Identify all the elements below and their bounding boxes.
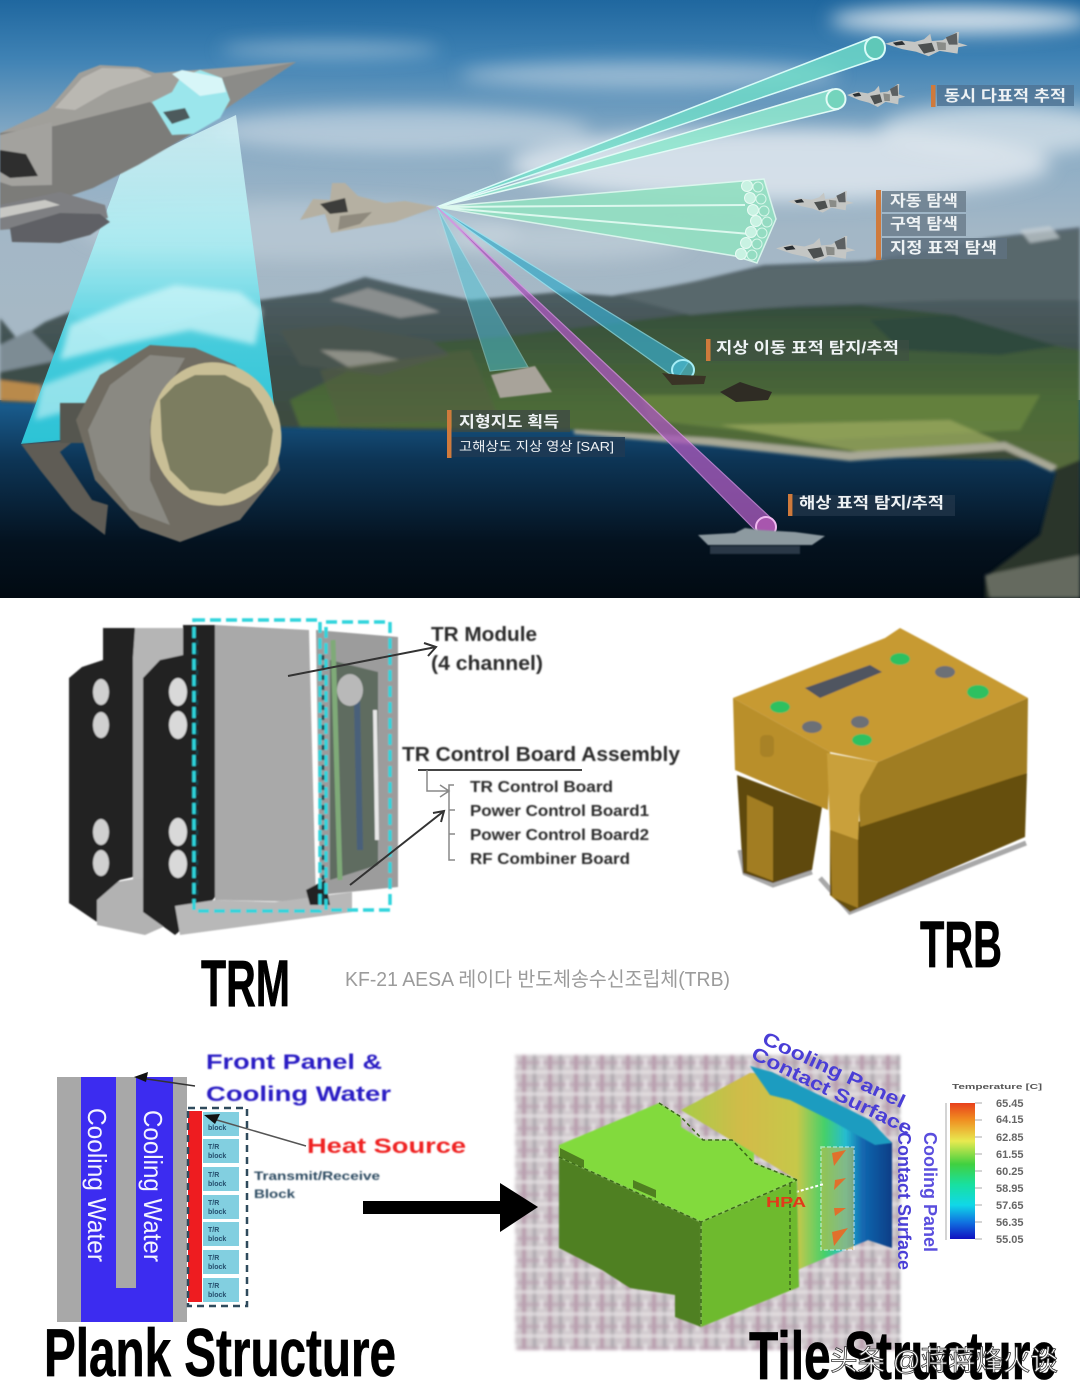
rear module [69,628,190,935]
label: search modes: 구역 탐색 [890,215,958,233]
sea [0,400,1080,598]
beam: SAR ground mapping [437,207,552,398]
snow peaks through the beam [35,285,262,420]
TR Module label: TR Module [431,624,537,646]
panel: plank structure diagram [57,1051,466,1322]
T/R blocks: block [208,1292,226,1299]
HPA label: HPA [766,1194,806,1211]
caption: KF-21 AESA 레이다 반도체송수신조립체(TRB) [345,968,730,991]
fighter intake [0,122,52,186]
panel: tile structure thermal model [515,1028,1043,1350]
clouds [80,6,1080,260]
T/R blocks: T/R [208,1227,219,1234]
radar rear unit [60,403,88,443]
control board assembly [306,630,398,905]
fighter upper fuselage [0,62,296,133]
beam to radar [21,115,276,444]
TR control board assembly label: TR Control Board [470,779,613,796]
TR control board assembly label: TR Control Board Assembly [402,744,681,766]
TRB upper housing side right [858,698,1028,827]
dashed seams [559,1103,797,1327]
temperature legend [946,1082,1043,1246]
label: simultaneous multi-target tracking [931,85,1074,107]
panel: radar modes scene [0,0,1080,598]
arrow: to TR module [288,643,436,676]
warship [698,528,825,554]
cooling water right text: Cooling Water [138,1110,168,1262]
dashed block outline [188,1108,247,1306]
TRB lower right housing [830,773,1027,912]
HPA highlight box [796,1147,854,1250]
temperature legend: Temperature [C] [952,1082,1043,1091]
plank outer wall [57,1077,187,1322]
AESA radar antenna [21,345,296,542]
arrow: front panel [134,1072,195,1086]
beam: sea target [437,207,776,537]
label: search modes: 자동 탐색 [890,192,958,210]
temperature legend: 57.65 [996,1200,1024,1212]
beams [437,37,885,537]
TR Module label: (4 channel) [431,653,543,675]
front module body [215,625,316,902]
front panel label [206,1051,391,1106]
cooling panel angled label: Cooling Panel [759,1028,908,1113]
front module plate [143,625,215,935]
Plank Structure title: Plank Structure [44,1315,396,1391]
radar housing [76,345,280,542]
TRB lower left module [737,775,822,883]
T/R blocks: block [208,1181,226,1188]
bottom bracket [175,892,352,935]
beam: ground moving target [437,207,694,380]
label: terrain map and SAR: 지형지도 획득 [459,413,559,431]
TRB green ports [770,653,989,746]
large stealth fighter [0,62,296,243]
panel: TR module drawing [69,620,398,935]
beam: air target 2 [437,89,846,207]
TR control board assembly label [402,744,681,868]
T/R blocks: block [208,1236,226,1243]
T/R blocks: block [208,1125,226,1132]
green module top face [559,1103,797,1222]
arrow: heat source [204,1114,306,1146]
dashed highlight: TR module [194,620,320,911]
green module left face [559,1157,701,1327]
T/R blocks: block [208,1153,226,1160]
panel: white lower background [0,598,1080,1400]
front panel label: Front Panel & [206,1051,382,1074]
cooling water left text: Cooling Water [82,1108,112,1262]
TRB connector [805,665,882,698]
fighter weapons [0,192,108,230]
T/R blocks: T/R [208,1200,219,1207]
label: terrain map and SAR [447,410,625,458]
T/R blocks [203,1112,239,1302]
top tabs [560,1148,656,1198]
TR control board assembly label: Power Control Board2 [470,827,649,844]
contact surface angled label: Contact Surface [748,1044,915,1140]
T/R blocks: block [208,1209,226,1216]
TR Module label [431,624,543,675]
TRB top face [733,628,1028,762]
cooling panel vertical label: Cooling Panel [920,1132,940,1252]
label: search modes: 지정 표적 탐색 [890,239,997,257]
TRB title: TRB [920,907,1002,981]
label: ground moving target: 지상 이동 표적 탐지/추적 [716,339,899,357]
green module front face [701,1180,799,1327]
heat panel [681,1073,892,1270]
transmit receive label: Block [254,1187,295,1201]
fighter belly and side [0,98,193,208]
transmit receive label: Transmit/Receive [254,1169,380,1183]
arrow: to control board [350,811,444,885]
watermark: 头条 @蒋蒋烽火谈 [830,1345,1058,1376]
radar array [160,375,273,494]
sky background [0,0,1080,420]
TRB corner column [827,753,878,840]
label: sea target: 해상 표적 탐지/추적 [799,494,944,512]
temperature legend: 64.15 [996,1114,1024,1126]
label: sea target [788,494,955,516]
temperature legend: 55.05 [996,1234,1024,1246]
contact surface vertical label: Contact Surface [894,1132,914,1270]
enemy fighter 2 [847,84,905,107]
temperature legend: 60.25 [996,1166,1024,1178]
label: terrain map and SAR: 고해상도 지상 영상 [SAR] [459,439,614,454]
dashed highlight: control board [326,622,390,910]
cooling channel [81,1077,173,1322]
TR control board assembly label: Power Control Board1 [470,803,649,820]
front panel label: Cooling Water [206,1083,391,1106]
T/R blocks: block [208,1264,226,1271]
fighter canopy hump [55,68,152,110]
temperature legend: 65.45 [996,1098,1024,1110]
radome highlight [152,70,230,135]
label: ground moving target [706,339,909,361]
TRB feet [740,843,1026,912]
T/R blocks: T/R [208,1255,219,1262]
TRB upper housing side left [733,698,830,810]
tank 2 [720,382,772,402]
cooling panel top [750,1066,892,1145]
transmit receive label [254,1169,380,1201]
mesh background [515,1055,900,1350]
panel: TRB module drawing [733,628,1028,912]
TRM title: TRM [201,946,290,1020]
beam: air target 1 [437,37,885,207]
radar bracket [21,440,108,535]
friendly fighter [300,183,437,233]
big arrow [363,1183,538,1232]
temperature legend: 62.85 [996,1132,1024,1144]
enemy fighter 1 [885,32,968,56]
T/R blocks: T/R [208,1172,219,1179]
T/R blocks: T/R [208,1283,219,1290]
heat source label: Heat Source [307,1135,466,1158]
mountains [0,226,1080,598]
temperature legend: 61.55 [996,1149,1024,1161]
enemy fighter 4 [776,236,856,262]
radar disc [136,348,296,520]
heat source strip [188,1111,202,1302]
temperature legend: 56.35 [996,1217,1024,1229]
temperature legend: 58.95 [996,1183,1024,1195]
plank divider [116,1077,136,1288]
label: simultaneous multi-target tracking: 동시 다표적 추적 [944,87,1066,105]
tank 1 [662,373,706,385]
TR control board assembly label: RF Combiner Board [470,851,630,868]
T/R blocks: T/R [208,1144,219,1151]
fighter nose shade [200,62,296,118]
label: search modes [876,190,1007,260]
enemy fighter 3 [788,191,854,213]
beam: search fan [437,179,776,263]
